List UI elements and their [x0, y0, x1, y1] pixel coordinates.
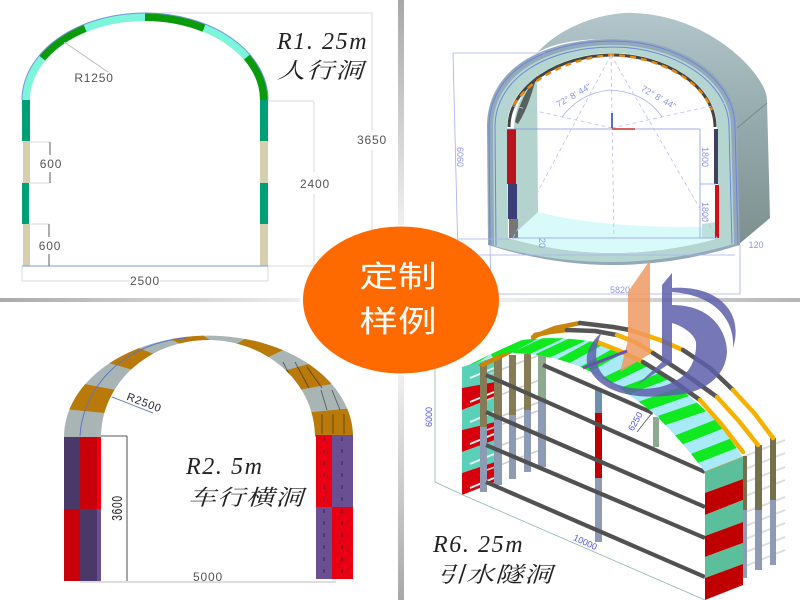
callout text line 2: 样例 — [359, 305, 437, 339]
arch centre line — [80, 338, 185, 436]
columns — [480, 354, 659, 542]
rear rail 1 — [533, 323, 773, 438]
right end columns — [743, 438, 776, 578]
label 120: 120 — [748, 240, 764, 250]
label radius: 6250 — [626, 410, 645, 433]
label 20: 20 — [537, 238, 547, 248]
radius title: R2. 5m — [185, 454, 264, 480]
tunnel name: 车行横洞 — [188, 486, 307, 510]
front ring outer band — [487, 39, 740, 265]
angle label left: 72° 8' 44" — [554, 81, 593, 109]
wall shadow — [515, 76, 537, 124]
dimension lines — [453, 53, 740, 294]
front ring — [493, 45, 734, 262]
panel: R6.25m water diversion tunnel — [424, 323, 785, 600]
radius label: R1250 — [74, 71, 114, 85]
label 1800 lower: 1800 — [700, 202, 710, 222]
back purlins — [487, 353, 545, 470]
label 600 upper: 600 — [40, 157, 62, 171]
arch with alternating segments — [64, 336, 353, 437]
callout: central orange ellipse — [303, 226, 499, 374]
left inner wall — [513, 74, 538, 235]
panel: R2.5m vehicle cross tunnel — [64, 336, 353, 582]
left wall blocks — [64, 437, 101, 581]
arch segment — [26, 17, 264, 100]
radius leader — [112, 397, 153, 413]
radius leader — [637, 413, 652, 432]
rear rail 3 — [597, 342, 743, 452]
lining arch — [509, 55, 715, 127]
tunnel opening — [507, 53, 719, 253]
green striped roof band — [464, 338, 743, 472]
right end purlins — [743, 440, 785, 567]
longitudinal rails — [486, 365, 705, 577]
front end wall stripes — [705, 457, 743, 600]
logo: blue JD mark — [587, 273, 736, 397]
radius label: R2500 — [125, 391, 163, 415]
radius title: R6. 25m — [432, 532, 524, 558]
left lining wall — [507, 129, 518, 238]
panel: R1.25m pedestrian tunnel — [22, 13, 387, 288]
label 10000: 10000 — [572, 532, 599, 552]
label 5000: 5000 — [193, 570, 223, 584]
tunnel name: 引水隧洞 — [437, 563, 556, 587]
label 6000: 6000 — [424, 407, 434, 427]
label 2400: 2400 — [300, 177, 330, 191]
label 600 lower: 600 — [39, 239, 61, 253]
angle label right: 72° 8' 44" — [639, 83, 678, 111]
right wall blocks — [316, 435, 353, 579]
base line — [80, 581, 336, 583]
callout text line 1: 定制 — [359, 260, 437, 294]
height dimension — [101, 436, 127, 581]
tunnel body — [537, 13, 770, 245]
ring outlines — [489, 41, 738, 246]
arch outline — [22, 13, 268, 100]
axis marker — [611, 113, 613, 128]
right wall segments — [260, 100, 268, 266]
arrow: translucent orange up arrow — [620, 260, 650, 372]
dimension frame lines — [22, 13, 372, 281]
rear rail 2 — [535, 330, 758, 445]
radius leader — [64, 42, 108, 72]
label 3600: 3600 — [109, 495, 125, 521]
back wall blocks — [462, 357, 495, 495]
tunnel name: 人行洞 — [277, 60, 367, 83]
right lining wall — [714, 129, 719, 238]
right wall sliver — [702, 222, 718, 238]
panel: 3D tunnel section — [453, 13, 770, 295]
tunnel floor — [508, 212, 719, 253]
label 5820: 5820 — [610, 285, 630, 295]
base dimension line — [435, 367, 705, 600]
label 3650: 3650 — [357, 133, 387, 147]
label 2500: 2500 — [130, 274, 160, 288]
base line — [22, 265, 268, 267]
label 6060: 6060 — [455, 147, 465, 167]
label 1800 upper: 1800 — [700, 147, 710, 167]
dark green crown segments — [42, 17, 264, 100]
left wall segments — [22, 100, 30, 266]
front corner cap — [480, 353, 510, 366]
radius title: R1. 25m — [276, 29, 368, 55]
purple roof brace — [583, 351, 627, 368]
roof front edge — [705, 457, 743, 472]
dimension arrows — [49, 142, 50, 266]
